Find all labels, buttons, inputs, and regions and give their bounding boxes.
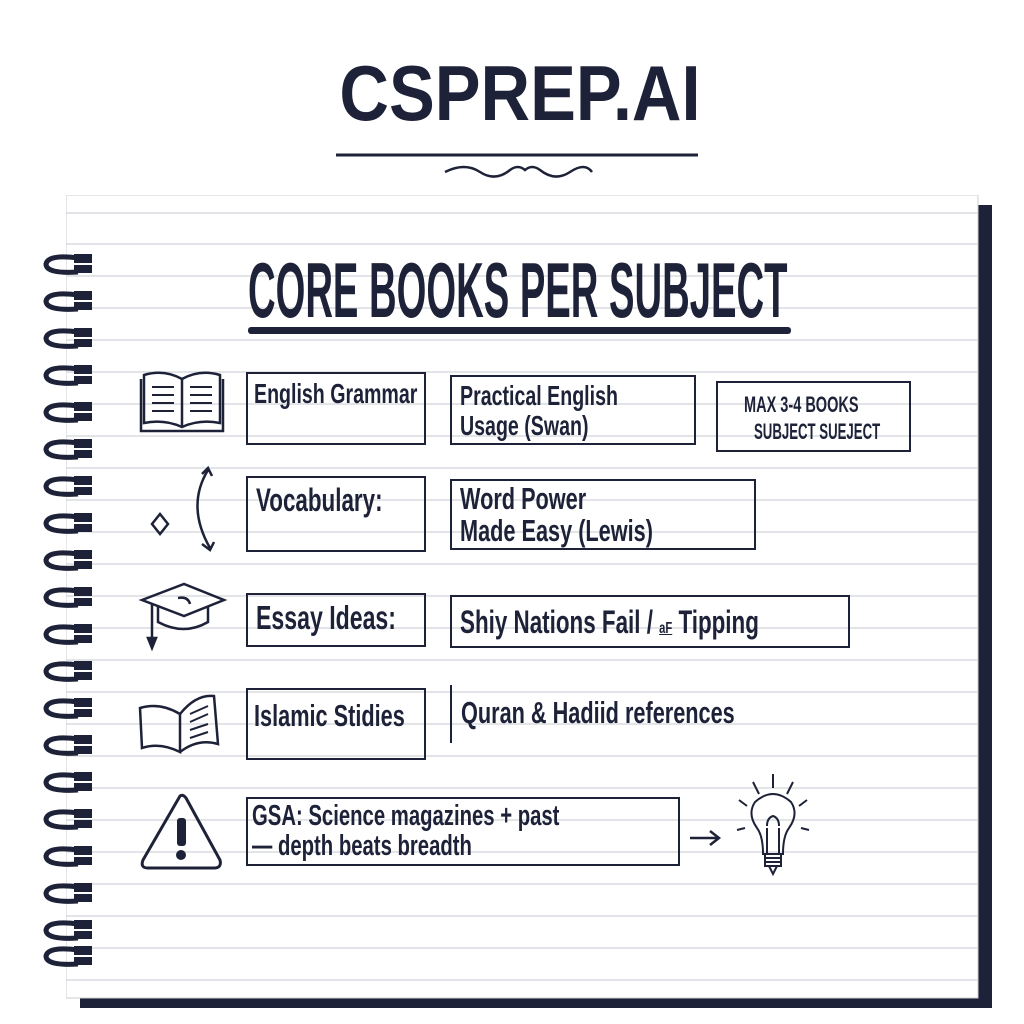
box: Essay Ideas bbox=[246, 593, 426, 647]
row 1: English Grammar bbox=[140, 372, 911, 452]
box: GSA: — depth beats breadth bbox=[252, 830, 472, 862]
arrow bbox=[690, 830, 721, 846]
icon: light bulb bbox=[736, 774, 810, 876]
box: Vocabulary bbox=[246, 476, 426, 552]
box: Vocabulary: Vocabulary: bbox=[256, 482, 383, 518]
box: Essay Ideas: Essay Ideas: bbox=[256, 599, 396, 636]
icon: open book bbox=[138, 694, 220, 754]
box: Max 3-4 books: SUBJECT SUEJECT bbox=[754, 419, 880, 444]
box: GSA: GSA: Science magazines + past bbox=[252, 800, 559, 832]
box: Islamic Studies bbox=[246, 688, 426, 760]
box: Practical English Usage: Usage (Swan) bbox=[460, 410, 589, 441]
box: English Grammar: English Grammar bbox=[254, 378, 417, 409]
icon: open book bbox=[140, 372, 224, 432]
row 5: GSA bbox=[140, 774, 810, 876]
notebook page bbox=[66, 195, 992, 1008]
box: Practical English Usage bbox=[450, 375, 696, 445]
box: Word Power Made Easy bbox=[450, 479, 756, 550]
title: CSPREP.AI bbox=[339, 49, 701, 137]
icon: graduation cap bbox=[138, 582, 228, 652]
row 3: Essay Ideas bbox=[138, 582, 850, 652]
row 2: Vocabulary bbox=[150, 466, 756, 552]
box: Why Nations Fail / Tipping: Shiy Nations Fail / aF Tipping bbox=[460, 604, 759, 640]
box: Word Power Made Easy: Word Power bbox=[460, 481, 586, 516]
row 4: Islamic Studies bbox=[138, 685, 735, 760]
box: English Grammar bbox=[246, 372, 426, 445]
box: Max 3-4 books bbox=[716, 381, 911, 452]
icon: diamond and curved arrows bbox=[150, 466, 216, 552]
spiral binding bbox=[44, 254, 92, 967]
divider and text: Quran & Hadith bbox=[450, 685, 781, 743]
title underline flourish bbox=[336, 154, 698, 178]
heading underline bbox=[248, 327, 791, 334]
icon: warning triangle bbox=[140, 794, 222, 870]
box: Word Power Made Easy: Made Easy (Lewis) bbox=[460, 513, 653, 548]
box: Practical English Usage: Practical English bbox=[460, 380, 618, 411]
box: GSA bbox=[246, 797, 680, 866]
box: Islamic Studies: Islamic Stidies bbox=[254, 698, 405, 733]
divider and text: Quran & Hadith: Quran & Hadiid references bbox=[461, 695, 735, 730]
box: Max 3-4 books: MAX 3-4 BOOKS bbox=[744, 392, 859, 417]
heading: CORE BOOKS PER SUBJECT bbox=[248, 246, 787, 334]
box: Why Nations Fail / Tipping bbox=[450, 595, 850, 648]
